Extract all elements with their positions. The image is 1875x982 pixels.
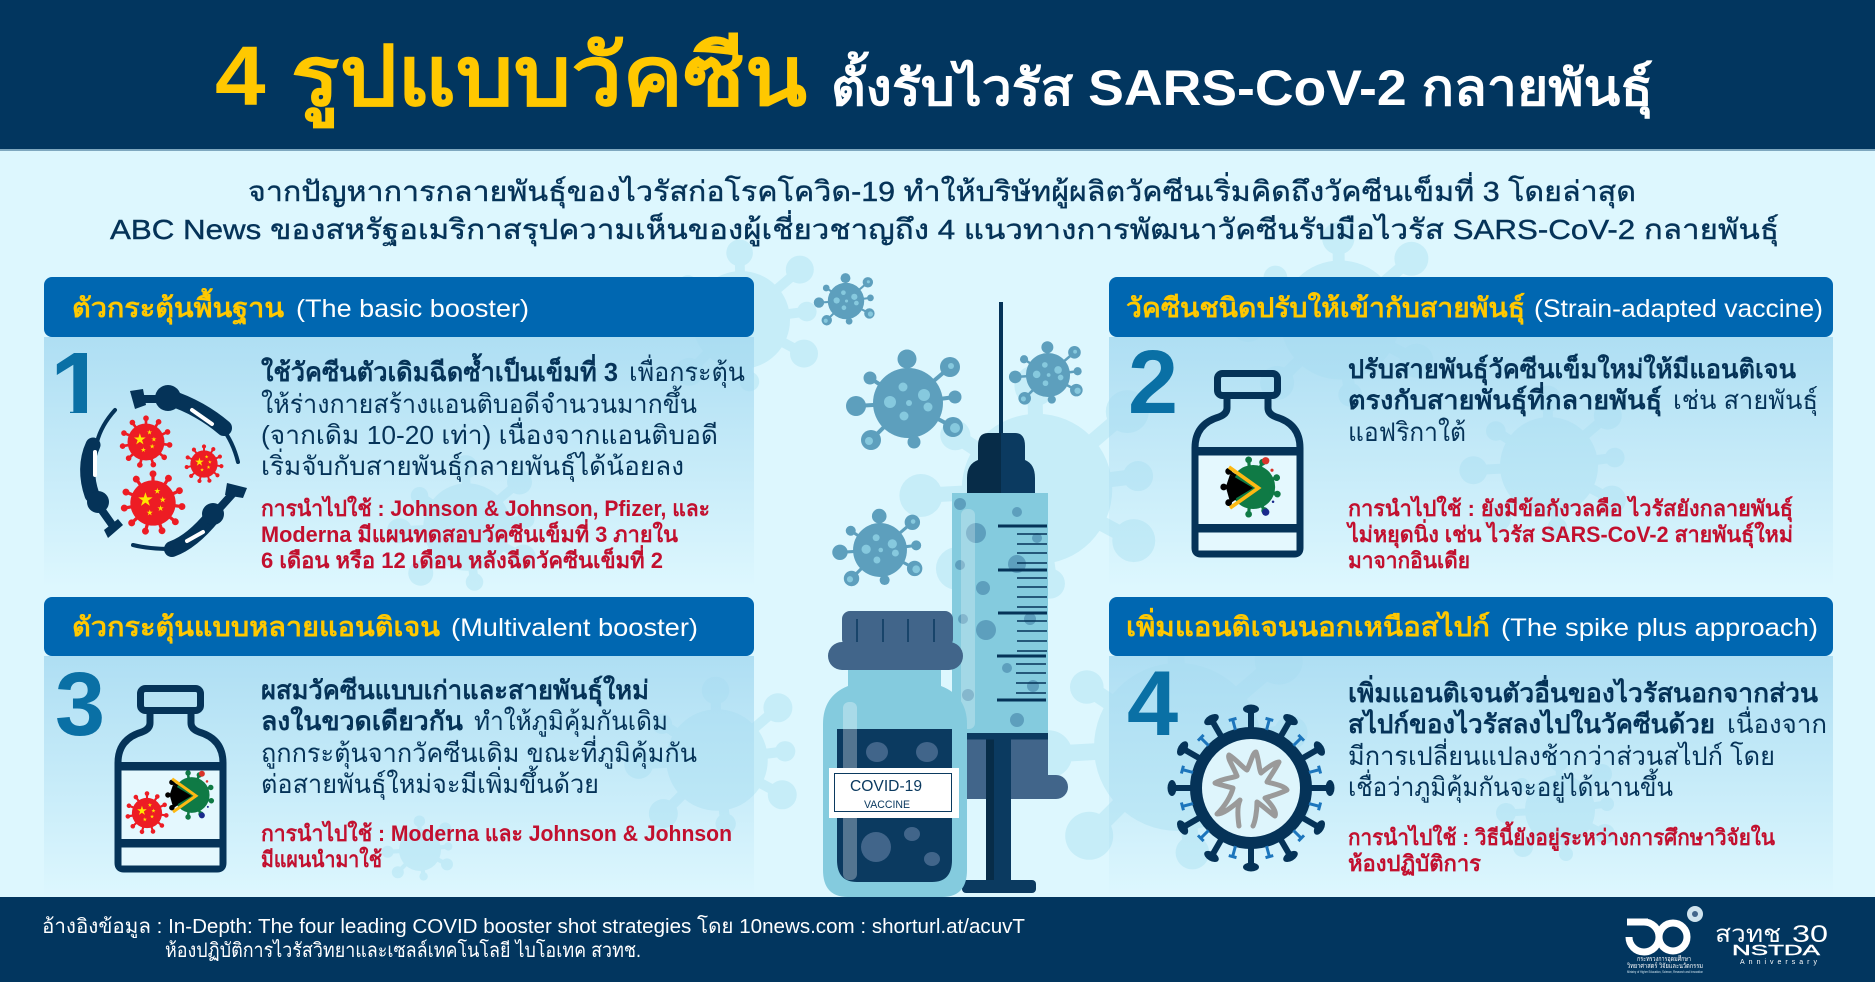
panel 1 body text: เริ่มจับกับสายพันธุ์กลายพันธุ์ได้น้อยลง (261, 448, 684, 482)
source credits: อ้างอิงข้อมูล : In-Depth: The four leading COVID booster shot strategies โดย 10news.com : shorturl.at/acuvT (42, 915, 1025, 939)
icon: small virus top (814, 273, 875, 325)
icon: bottle with South Africa variant (1192, 374, 1303, 554)
panel 4 usage note: ห้องปฏิบัติการ (1348, 851, 1481, 876)
panel 3 body text (261, 675, 697, 800)
panel 4 header: (The spike plus approach) (1501, 614, 1818, 642)
panel 1: basic booster (44, 277, 754, 587)
vial label: COVID-19 (850, 778, 922, 795)
panel 2 body text: เช่น สายพันธุ์ (1673, 385, 1818, 416)
number 2: 2 (1128, 333, 1178, 433)
vial label (829, 768, 959, 818)
panel 2 body text: แอฟริกาใต้ (1348, 417, 1466, 447)
logo: NSTDA anniversary: สวทช (1715, 921, 1781, 948)
panel 4 header (1109, 597, 1833, 656)
panel 4 usage note (1348, 821, 1775, 876)
source credits (42, 915, 1025, 962)
panel 3 usage note: มีแผนนำมาใช้ (261, 846, 382, 872)
panel 3 body text: ผสมวัคซีนแบบเก่าและสายพันธุ์ใหม่ (261, 675, 649, 707)
icon: coronavirus cross section (1168, 704, 1334, 872)
panel 2 usage note (1346, 495, 1793, 573)
panel 3 usage note: การนำไปใช้ : Moderna และ Johnson & Johnson (261, 820, 732, 846)
panel 2 usage note: มาจากอินเดีย (1348, 548, 1470, 573)
panel 4 body text: เชื่อว่าภูมิคุ้มกันจะอยู่ได้นานขึ้น (1348, 768, 1673, 803)
logo: ministry 60 years: Ministry of Higher Education, Science, Research and Innovation (1627, 969, 1703, 974)
source credits: ห้องปฏิบัติการไวรัสวิทยาและเซลล์เทคโนโลยี ไบโอเทค สวทช. (165, 939, 641, 962)
panel 1 usage note: Moderna มีแผนทดสอบวัคซีนเข็มที่ 3 ภายใน (261, 518, 678, 547)
panel 3: multivalent booster (44, 597, 754, 897)
logo: NSTDA anniversary: 30 (1792, 921, 1828, 948)
panel 1 usage note (261, 495, 710, 573)
main title: 4 รูปแบบวัคซีน (215, 29, 807, 129)
logo: NSTDA anniversary: Anniversary (1740, 959, 1818, 966)
panel 1 body text: เพื่อกระตุ้น (629, 354, 745, 388)
panel 1 body text: ใช้วัคซีนตัวเดิมฉีดซ้ำเป็นเข็มที่ 3 (261, 352, 618, 387)
panel 2 body text: ปรับสายพันธุ์วัคซีนเข็มใหม่ให้มีแอนติเจน (1348, 353, 1796, 386)
syringe (952, 302, 1068, 893)
panel 3 body text: ถูกกระตุ้นจากวัคซีนเดิม ขณะที่ภูมิคุ้มกัน (261, 735, 697, 769)
number 1: 1 (50, 332, 106, 444)
panel 4: spike plus approach (1109, 597, 1833, 897)
icon: bottle with mixed variants (115, 688, 226, 869)
vaccine vial (823, 611, 967, 897)
panel 2 header (1109, 277, 1833, 337)
panel 4 header: เพิ่มแอนติเจนนอกเหนือสไปก์ (1126, 607, 1490, 642)
panel 3 usage note (261, 820, 732, 872)
panel 2 header: (Strain-adapted vaccine) (1534, 295, 1823, 323)
panel 4 body text (1348, 674, 1827, 803)
central illustration: syringe, vial and viruses (814, 273, 1083, 897)
panel 3 body text: ทำให้ภูมิคุ้มกันเดิม (474, 706, 668, 737)
panel 4 usage note: การนำไปใช้ : วิธีนี้ยังอยู่ระหว่างการศึกษาวิจัยใน (1348, 821, 1775, 852)
panel 2 usage note: การนำไปใช้ : ยังมีข้อกังวลคือ ไวรัสยังกลายพันธุ์ (1348, 495, 1793, 523)
vial label: VACCINE (864, 799, 910, 811)
panel 2 body text (1348, 353, 1818, 447)
panel 3 header: ตัวกระตุ้นแบบหลายแอนติเจน (72, 612, 441, 644)
panel 3 body text: ลงในขวดเดียวกัน (261, 706, 463, 736)
panel 4 body text: มีการเปลี่ยนแปลงช้ากว่าส่วนสไปก์ โดย (1348, 738, 1775, 771)
icon: large virus (846, 350, 963, 450)
logo: NSTDA anniversary: NSTDA (1732, 942, 1820, 959)
number 4: 4 (1127, 653, 1178, 755)
panel 3 header (44, 597, 754, 656)
title banner (0, 0, 1875, 151)
panel 1 body text: (จากเดิม 10-20 เท่า) เนื่องจากแอนติบอดี (261, 417, 718, 450)
panel 2 header: วัคซีนชนิดปรับให้เข้ากับสายพันธุ์ (1126, 292, 1525, 325)
number 3: 3 (55, 655, 105, 755)
intro text: จากปัญหาการกลายพันธุ์ของไวรัสก่อโรคโควิด-19 ทำให้บริษัทผู้ผลิตวัคซีนเริ่มคิดถึงวัคซีนเข็มที่ 3 โดยล่าสุด (248, 172, 1636, 209)
panel 1 usage note: การนำไปใช้ : Johnson & Johnson, Pfizer, และ (261, 495, 710, 521)
sub title: ตั้งรับไวรัส SARS-CoV-2 กลายพันธุ์ (831, 51, 1653, 119)
panel 3 body text: ต่อสายพันธุ์ใหม่จะมีเพิ่มขึ้นด้วย (261, 765, 599, 800)
icon: virus above vial (832, 509, 922, 586)
panel 2 body text: ตรงกับสายพันธุ์ที่กลายพันธุ์ (1348, 381, 1662, 417)
faint background viruses (382, 222, 1626, 881)
logo: ministry 60 years (1627, 906, 1703, 974)
panel 2: strain-adapted vaccine (1109, 277, 1833, 587)
panel 4 body text: เนื่องจาก (1727, 706, 1827, 739)
intro text: ABC News ของสหรัฐอเมริกาสรุปความเห็นของผู้เชี่ยวชาญถึง 4 แนวทางการพัฒนาวัคซีนรับมือไวรัส SARS-CoV-2 กลายพันธุ์ (110, 210, 1779, 247)
panel 1 header (44, 277, 754, 337)
logo: NSTDA anniversary (1715, 921, 1828, 966)
panel 1 body text: ให้ร่างกายสร้างแอนติบอดีจำนวนมากขึ้น (261, 385, 697, 419)
panel 4 body text: สไปก์ของไวรัสลงไปในวัคซีนด้วย (1348, 708, 1715, 739)
panel 2 usage note: ไม่หยุดนิ่ง เช่น ไวรัส SARS-CoV-2 สายพันธุ์ใหม่ (1346, 518, 1793, 549)
footer (0, 897, 1875, 982)
panel 1 usage note: 6 เดือน หรือ 12 เดือน หลังฉีดวัคซีนเข็มที่ 2 (261, 544, 663, 573)
panel 4 body text: เพิ่มแอนติเจนตัวอื่นของไวรัสนอกจากส่วน (1348, 674, 1818, 708)
panel 1 header: (The basic booster) (296, 295, 529, 323)
intro text (110, 172, 1779, 247)
panel 3 header: (Multivalent booster) (451, 614, 698, 642)
icon: virus right of needle (1009, 341, 1083, 405)
panel 1 header: ตัวกระตุ้นพื้นฐาน (72, 287, 285, 326)
icon: antibodies around viruses (87, 385, 247, 549)
logo: ministry 60 years: วิทยาศาสตร์ วิจัยและนวัตกรรม (1627, 962, 1703, 970)
panel 1 body text (261, 352, 745, 482)
logo: ministry 60 years: กระทรวงการอุดมศึกษา (1637, 954, 1691, 963)
